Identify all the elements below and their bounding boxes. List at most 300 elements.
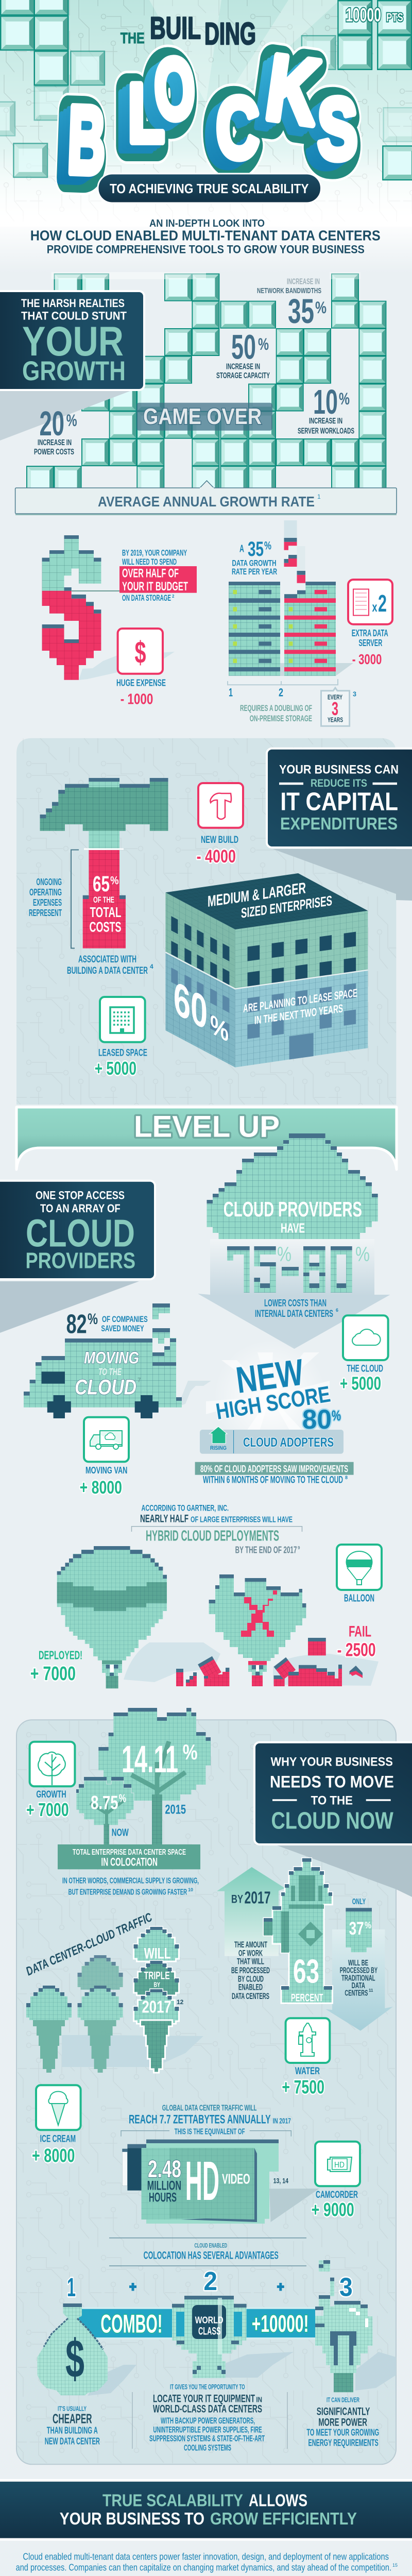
stat: server 10%: INCREASE IN [309, 417, 342, 426]
banner: true scalability [0, 2480, 412, 2539]
label: huge expense [116, 677, 166, 708]
shadow: camcorder [269, 2189, 319, 2222]
advantage 2: world class: COOLING SYSTEMS [184, 2444, 231, 2453]
pixel ice cream: tripled: WILL [144, 1945, 171, 1962]
label: growth: GROWTH [36, 1789, 66, 1800]
advantage 2: world class [149, 2382, 265, 2453]
text: gartner: 9 [298, 1546, 300, 1550]
rising cloud adopters bar: RISING [210, 1445, 227, 1451]
callout: every 3 years [321, 688, 356, 726]
new high score [206, 1340, 341, 1453]
label: extra data server: - 3000 [352, 651, 382, 667]
stat: data growth: % [264, 539, 271, 552]
shadows: balloons [124, 1642, 379, 1686]
pixel figures: 75-80%: % [355, 1243, 370, 1266]
closing paragraph: 15 [392, 2563, 398, 2568]
title: the building: DING [204, 16, 256, 51]
subtitle pill: TO ACHIEVING TRUE SCALABILITY [110, 181, 309, 196]
text: global traffic: GLOBAL DATA CENTER TRAFFIC WILL [162, 2104, 257, 2113]
text: by 2017 amount of work: THAT WILL [237, 1957, 264, 1967]
label: deployed: DEPLOYED! [39, 1649, 82, 1662]
panel: IT capital: YOUR BUSINESS CAN [279, 763, 399, 777]
label: camcorder: + 9000 [312, 2199, 354, 2221]
panel: IT capital: REDUCE ITS [311, 777, 367, 789]
timeline bracket [228, 679, 338, 699]
label: camcorder [312, 2190, 358, 2221]
label: leased space [95, 1047, 147, 1079]
stat: only 37%: CENTERS [345, 1989, 368, 1997]
axis label [15, 481, 397, 515]
labels: now / 2015 [112, 1803, 186, 1838]
plaque: colocation: TOTAL ENTERPRISE DATA CENTER SPACE [73, 1848, 186, 1857]
panel: harsh realities: THE HARSH REALTIES [21, 297, 125, 310]
text: by 2017 amount of work: BE PROCESSED [231, 1965, 270, 1975]
panel shadow [0, 390, 133, 440]
text: doubling [240, 703, 312, 723]
pixel hydrant: 63 [293, 1952, 319, 1990]
label: extra data server [352, 628, 388, 667]
stat: storage 50%: STORAGE CAPACITY [216, 371, 270, 380]
pixel light bulb [315, 2260, 373, 2392]
text: ongoing operating: EXPENSES [33, 897, 62, 908]
heading: colocation advantages: COLOCATION HAS SEVERAL ADVANTAGES [144, 2249, 279, 2261]
icon: extra server card [348, 580, 392, 624]
icon: dollar card [118, 629, 163, 674]
isometric building: SIZED ENTERPRISES [241, 892, 332, 921]
label: huge expense: - 1000 [121, 691, 153, 708]
pixel balloon: failed [209, 1574, 306, 1686]
text: associated with: 4 [150, 963, 153, 970]
text: associated with: ASSOCIATED WITH [78, 954, 136, 965]
isometric building [165, 873, 368, 1067]
panel: why your business: WHY YOUR BUSINESS [271, 1755, 393, 1769]
rubble [176, 1638, 363, 1686]
text: by 2017 amount of work: BY [231, 1892, 243, 1905]
icon: extra server card: x [372, 599, 377, 615]
combo banner: COMBO! [100, 2309, 162, 2338]
stat: only 37%: % [365, 1920, 371, 1930]
label: the cloud: + 5000 [340, 1373, 381, 1394]
pixel camcorder: VIDEO [222, 2171, 250, 2187]
text: ongoing operating: OPERATING [29, 887, 62, 897]
axis label: AVERAGE ANNUAL GROWTH RATE [98, 494, 315, 510]
banner: true scalability: GROW EFFICIENTLY [210, 2509, 357, 2528]
rising cloud adopters bar: CLOUD ADOPTERS [243, 1435, 334, 1450]
stat: only 37% [340, 1897, 377, 1997]
text: by 2017 amount of work: 2017 [244, 1888, 271, 1907]
text: over half of IT budget: 2 [172, 594, 175, 599]
text: lower costs: INTERNAL DATA CENTERS [255, 1309, 333, 1319]
text: by 2017 amount of work: THE AMOUNT [234, 1940, 267, 1950]
dividers [132, 2392, 287, 2449]
stat: power 20% [34, 404, 77, 456]
label: fail [337, 1623, 376, 1660]
text: ongoing operating: REPRESENT [29, 908, 62, 918]
label: leased space: + 5000 [95, 1058, 136, 1079]
title: blocks: O [152, 40, 197, 138]
text: over half of IT budget: YOUR IT BUDGET [122, 580, 188, 594]
icon: cloud card [343, 1315, 388, 1360]
stat: 65% [90, 872, 122, 935]
label: ice cream [32, 2133, 76, 2166]
text: doubling: REQUIRES A DOUBLING OF [240, 703, 312, 713]
stat: data growth [232, 538, 277, 577]
timeline bracket: 2 [279, 686, 283, 699]
panel: why your business: NEEDS TO MOVE [270, 1772, 394, 1791]
shadow: van [178, 1381, 211, 1406]
label: moving van: MOVING VAN [85, 1465, 127, 1476]
callout: every 3 years: 3 [353, 690, 356, 698]
title: the building: THE [121, 30, 145, 47]
pixel tree: now: % [119, 1792, 126, 1805]
text: gartner [132, 1503, 302, 1555]
stat: data growth: RATE PER YEAR [232, 567, 277, 577]
text: over half of IT budget: ON DATA STORAGE [122, 594, 171, 603]
label: the cloud [340, 1363, 383, 1394]
pixel van [24, 1303, 182, 1418]
icon: tree card [30, 1742, 75, 1786]
bracket [71, 850, 79, 948]
pixel money bag: $ [65, 2329, 84, 2389]
shadow: buildings [280, 663, 353, 676]
advantage 2: world class: WITH BACKUP POWER GENERATORS, [161, 2416, 255, 2426]
pixel money bag [37, 2303, 108, 2395]
pixel trophy: WORLD [195, 2315, 224, 2325]
text: by 2017 amount of work: DATA CENTERS [232, 1991, 269, 2001]
icon: camcorder card: HD [334, 2161, 345, 2170]
text: gartner: BY THE END OF 2017 [235, 1545, 297, 1555]
text: global traffic [121, 2104, 291, 2137]
icon: van card [84, 1417, 129, 1462]
advantage 2: world class: UNINTERRUPTIBLE POWER SUPPLIES, FIRE [153, 2426, 262, 2435]
text: over half of IT budget [119, 549, 197, 603]
isometric building: MEDIUM & LARGER [208, 879, 306, 910]
text: global traffic: IN 2017 [273, 2117, 291, 2126]
building: after [284, 582, 336, 676]
connector [72, 590, 119, 591]
panel: one stop access: PROVIDERS [26, 1248, 135, 1274]
text: 80% improvements [195, 1462, 354, 1485]
panel: one stop access [0, 1181, 155, 1279]
text: over half of IT budget: BY 2019, YOUR COMPANY [122, 549, 187, 558]
stat: server 10% [298, 383, 354, 436]
advantage 3: more power: SIGNIFICANTLY [317, 2405, 370, 2417]
label: deployed [30, 1649, 82, 1685]
stat: storage 50%: % [258, 335, 269, 353]
text: ongoing operating: ONGOING [36, 877, 62, 887]
title: blocks: S [318, 80, 357, 177]
pixel ice cream: tripled: TRIPLE [144, 1970, 170, 1982]
pixel van: MOVING [84, 1349, 139, 1367]
text: 80% improvements: 8 [345, 1475, 348, 1480]
title: the building [121, 11, 256, 51]
pixel ice cream: medium [78, 1955, 123, 2073]
stat: only 37%: 37 [349, 1919, 364, 1939]
pixel cloud [207, 1133, 378, 1239]
text: associated with: BUILDING A DATA CENTER [67, 965, 148, 976]
label: fail: FAIL [349, 1623, 371, 1640]
advantage 2: world class: LOCATE YOUR IT EQUIPMENT [153, 2393, 255, 2404]
advantage 2: world class: WORLD-CLASS DATA CENTERS [153, 2403, 262, 2415]
pixel hydrant [264, 1858, 332, 2004]
pixel hydrant: PERCENT [291, 1992, 323, 2004]
stat: only 37%: ONLY [352, 1897, 366, 1906]
panel: harsh realities [0, 291, 144, 390]
stat: storage 50% [216, 328, 270, 380]
combo banner [79, 2307, 315, 2340]
label: deployed: + 7000 [30, 1663, 76, 1685]
new high score: NEW [234, 1351, 306, 1401]
numbers: 1 [67, 2273, 76, 2302]
section: why move to the cloud [16, 1708, 412, 2464]
stat: data growth: 35 [248, 538, 264, 561]
text: over half of IT budget: WILL NEED TO SPEND [122, 557, 177, 567]
heading: data center cloud traffic: DATA CENTER-CLOUD TRAFFIC [24, 1910, 154, 1978]
panel: harsh realities: THAT COULD STUNT [21, 310, 127, 323]
text: ongoing operating [29, 877, 62, 918]
pixel figures: 75-80% [227, 1243, 370, 1293]
banner: true scalability: TRUE SCALABILITY [102, 2490, 243, 2510]
label: leased space: LEASED SPACE [98, 1047, 147, 1058]
plaque: colocation: IN COLOCATION [101, 1856, 158, 1869]
label: new build: - 4000 [197, 846, 236, 867]
banner: true scalability: ALLOWS [249, 2490, 307, 2510]
subtitle pill [98, 174, 321, 203]
label: water: WATER [295, 2066, 320, 2077]
isometric building: % [210, 1008, 229, 1048]
text: by 2017 amount of work [231, 1888, 271, 2001]
label: ice cream: + 8000 [32, 2145, 75, 2166]
icon: ice cream card [36, 2085, 81, 2130]
panel: why your business: TO THE [311, 1794, 353, 1808]
section: capital expenditures [16, 738, 412, 1105]
stat: 65%: TOTAL [90, 904, 122, 920]
stat: only 37%: 11 [369, 1988, 373, 1993]
numbers: 2 [203, 2266, 217, 2296]
text: lower costs [255, 1298, 338, 1319]
pixel camcorder: HOURS [149, 2190, 177, 2205]
section: level up banner [16, 1107, 397, 1170]
new high score: 80 [302, 1404, 332, 1435]
panel: one stop access: TO AN ARRAY OF [40, 1202, 121, 1215]
callout: every 3 years: 3 [332, 698, 338, 719]
panel: IT capital: EXPENDITURES [280, 814, 398, 833]
text: global traffic: THIS IS THE EQUIVALENT OF [175, 2127, 245, 2136]
section: cloud providers [0, 1133, 390, 1688]
pixel tree: 2015 [98, 1708, 211, 1844]
stat: storage 50%: INCREASE IN [226, 363, 260, 371]
advantage 1: cheaper [45, 2404, 100, 2446]
label: moving van: + 8000 [80, 1478, 122, 1498]
stat: 65%: 65 [93, 872, 110, 896]
pixel camcorder [122, 2140, 279, 2224]
advantage 2: world class: IT GIVES YOU THE OPPORTUNITY TO [170, 2382, 245, 2391]
stat: only 37%: PROCESSED BY [340, 1966, 377, 1975]
banner: true scalability: YOUR BUSINESS TO [60, 2509, 204, 2528]
pixel ice cream: tripled: 2017 [142, 1997, 171, 2016]
pixel trophy [172, 2296, 247, 2378]
pixel cloud: HAVE [281, 1221, 305, 1236]
panel: harsh realities: YOUR [22, 318, 124, 365]
pixel hammer [40, 778, 168, 948]
panel shadow [277, 1845, 412, 1897]
stat: 82%: % [88, 1311, 98, 1328]
pixel camcorder: MILLION [147, 2179, 181, 2193]
icon: balloon card [337, 1545, 382, 1590]
axis label: 1 [317, 493, 321, 500]
callout: every 3 years: EVERY [328, 693, 342, 701]
circuit panel [16, 738, 396, 1105]
isometric building: 60 [174, 971, 208, 1041]
text: associated with [67, 954, 153, 976]
stat: 82%: 82 [66, 1310, 87, 1340]
text: gartner: OF LARGE ENTERPRISES WILL HAVE [191, 1515, 293, 1524]
section: costs [42, 520, 392, 726]
labels: now / 2015: 2015 [165, 1803, 186, 1817]
building: before [229, 582, 280, 676]
label: camcorder: CAMCORDER [316, 2190, 358, 2200]
advantage 1: cheaper: IT'S USUALLY [58, 2404, 87, 2412]
icon: hydrant card [286, 2018, 330, 2063]
decorative tiles right [301, 0, 412, 180]
title: blocks [55, 35, 357, 202]
shadow: ice creams [62, 2035, 203, 2067]
up arrow [217, 1867, 285, 1956]
pixel camcorder: 2.48 [148, 2155, 181, 2182]
stat: 65%: COSTS [90, 919, 122, 935]
intro text: HOW CLOUD ENABLED MULTI-TENANT DATA CENTERS [30, 228, 381, 244]
plaque: colocation [58, 1844, 200, 1869]
text: lower costs: 6 [336, 1308, 338, 1313]
icon: camcorder card [315, 2142, 360, 2186]
text: over half of IT budget: OVER HALF OF [122, 567, 179, 581]
pixel figures: 75-80%: % [277, 1243, 291, 1266]
label: water: + 7500 [282, 2076, 324, 2097]
closing paragraph [16, 2551, 398, 2572]
stat: data growth: DATA GROWTH [232, 558, 276, 568]
intro text: AN IN-DEPTH LOOK INTO [149, 218, 265, 229]
shadows: advantages [88, 2352, 396, 2396]
pixel van: CLOUD [75, 1375, 136, 1399]
advantage 1: cheaper: CHEAPER [53, 2412, 92, 2426]
pixel camcorder: HD [185, 2149, 219, 2212]
icon: hammer card [198, 783, 243, 828]
numbers: 3 [339, 2273, 353, 2302]
label: extra data server: EXTRA DATA [352, 628, 388, 638]
label: fail: - 2500 [337, 1639, 376, 1660]
combo banner: +10000! [252, 2310, 309, 2337]
text: gartner: NEARLY HALF [140, 1513, 188, 1524]
stat: 82% [66, 1310, 148, 1340]
section: header [0, 0, 412, 273]
text: other words: BUT ENTERPRISE DEMAND IS GROWING FASTER [68, 1888, 187, 1897]
stat: server 10%: 10 [313, 383, 338, 421]
falling tetris blocks [20, 2572, 412, 2576]
text: by 2017 amount of work: ENABLED [238, 1982, 263, 1992]
stat: power 20%: 20 [39, 404, 64, 443]
pixel tree: now: 8.75 [91, 1792, 118, 1814]
label: new build [197, 835, 238, 867]
title: blocks: K [261, 35, 325, 144]
panel: one stop access: CLOUD [26, 1211, 135, 1255]
text: by 2017 amount of work: OF WORK [238, 1948, 263, 1958]
down arrow background [198, 1239, 390, 1349]
icon: leased building card [100, 997, 145, 1042]
stat: 65%: OF THE [93, 895, 114, 905]
advantage 1: cheaper: NEW DATA CENTER [45, 2436, 100, 2446]
panel: one stop access: ONE STOP ACCESS [36, 1189, 125, 1201]
label: moving van [80, 1465, 127, 1498]
pixel tree: 2015: % [183, 1740, 198, 1764]
text: by 2017 amount of work: BY CLOUD [238, 1974, 264, 1984]
label: huge expense: HUGE EXPENSE [116, 677, 166, 688]
stat: 82%: SAVED MONEY [101, 1324, 144, 1333]
text: other words: IN OTHER WORDS, COMMERCIAL SUPPLY IS GROWING, [62, 1877, 199, 1886]
stat: network 35%: % [315, 298, 327, 317]
stat: power 20%: INCREASE IN [38, 438, 72, 447]
stat: network 35%: 35 [288, 292, 314, 331]
pixel ice cream: tripled: 12 [177, 1998, 184, 2006]
advantage 3: more power: IT CAN DELIVER [327, 2396, 359, 2403]
stat: power 20%: POWER COSTS [34, 448, 74, 456]
label: growth [26, 1789, 69, 1820]
intro text [30, 218, 381, 256]
pixel van: 7 [138, 1377, 141, 1384]
label: growth: + 7000 [26, 1799, 69, 1820]
stat: 65%: % [110, 874, 119, 887]
text: other words [62, 1877, 199, 1897]
advantage 3: more power: MORE POWER [318, 2416, 367, 2428]
panel: IT capital [267, 749, 412, 848]
stat: server 10%: % [339, 389, 350, 408]
new high score: % [332, 1408, 341, 1423]
timeline bracket: 1 [229, 686, 233, 699]
stat: power 20%: % [66, 411, 77, 430]
pixel trophy: CLASS [198, 2326, 221, 2337]
decorative tiles left [0, 0, 105, 178]
stat: storage 50%: 50 [231, 328, 256, 367]
text: gartner: ACCORDING TO GARTNER, INC. [141, 1503, 229, 1513]
panel: harsh realities: GROWTH [22, 356, 126, 386]
label: balloon: BALLOON [344, 1592, 374, 1604]
rising cloud adopters bar [200, 1427, 344, 1454]
isometric building: IN THE NEXT TWO YEARS [254, 1002, 343, 1027]
plus icons [129, 2283, 284, 2291]
stat: network 35%: INCREASE IN [287, 278, 320, 286]
pixel balloon: deployed [57, 1546, 167, 1688]
icon: extra server card: 2 [378, 590, 387, 617]
text: gartner: HYBRID CLOUD DEPLOYMENTS [146, 1528, 279, 1545]
falling blocks [284, 520, 305, 583]
score: PTS [386, 11, 403, 24]
section: level up banner: LEVEL UP [134, 1110, 280, 1144]
block stack [26, 272, 386, 494]
label: water [282, 2066, 324, 2097]
title: the building: BUIL [150, 11, 201, 45]
stat: only 37%: DATA [352, 1981, 365, 1990]
pixel van: TO THE [98, 1367, 122, 1377]
advantage 2: world class: SUPPRESSION SYSTEMS & STATE-OF-THE-ART [149, 2434, 265, 2444]
pixel ice cream: tripled [134, 1927, 184, 2073]
pixel ice cream: small [26, 1986, 72, 2073]
label: new build: NEW BUILD [201, 835, 238, 845]
label: the cloud: THE CLOUD [347, 1363, 383, 1374]
callout: every 3 years: YEARS [328, 716, 343, 724]
advantage 2: world class: IN [256, 2395, 262, 2404]
score: 10000 [346, 5, 381, 26]
advantage 1: cheaper: THAN BUILDING A [47, 2425, 98, 2435]
title: blocks: C [216, 79, 259, 176]
